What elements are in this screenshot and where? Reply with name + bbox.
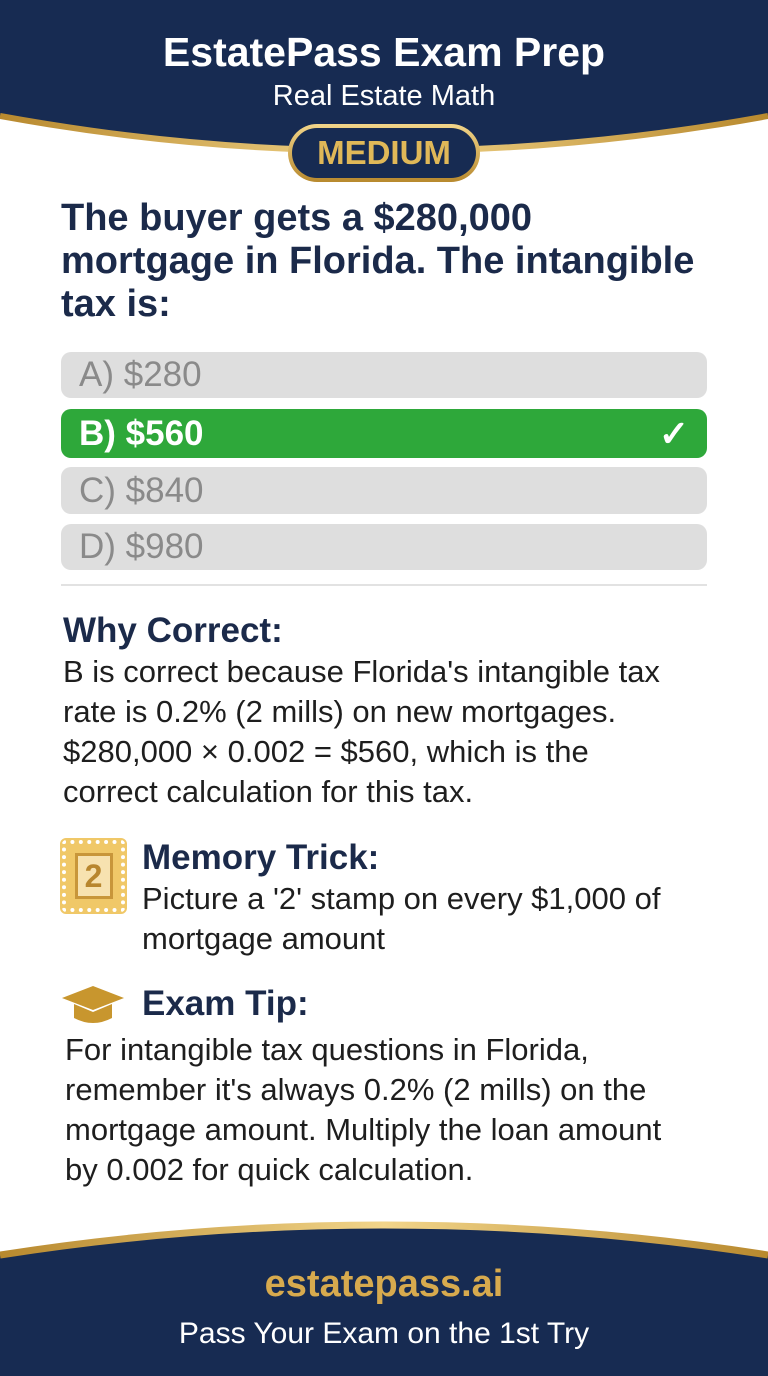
text: memory trick xyxy=(142,881,661,956)
footer tagline: Pass Your Exam on the 1st Try xyxy=(179,1317,589,1350)
text: why correct: B is correct because Florida's intangible tax xyxy=(63,654,660,689)
text: exam tip: mortgage amount. Multiply the loan amount xyxy=(65,1112,661,1147)
option B correct: B) $560 xyxy=(79,414,204,452)
text: exam tip: by 0.002 for quick calculation. xyxy=(65,1152,473,1187)
title: EstatePass Exam Prep xyxy=(163,29,605,75)
text: why correct: $280,000 × 0.002 = $560, which is the xyxy=(63,734,589,769)
header background xyxy=(0,0,768,152)
question xyxy=(61,197,694,325)
question: tax is: xyxy=(61,283,171,325)
option B correct xyxy=(61,409,707,458)
option C xyxy=(61,467,707,514)
badge: medium xyxy=(288,124,480,182)
heading: memory trick: Memory Trick: xyxy=(142,838,379,877)
text: why correct: correct calculation for this tax. xyxy=(63,774,473,809)
footer brand: estatepass.ai xyxy=(265,1263,503,1305)
text: memory trick: mortgage amount xyxy=(142,921,385,956)
question: The buyer gets a $280,000 xyxy=(61,197,532,239)
option D: D) $980 xyxy=(79,527,204,566)
option B correct: ✓ xyxy=(659,412,689,454)
heading: exam tip: Exam Tip: xyxy=(142,984,309,1023)
option D xyxy=(61,524,707,570)
option A: A) $280 xyxy=(79,355,202,394)
text: exam tip: For intangible tax questions in Florida, xyxy=(65,1032,589,1067)
text: exam tip xyxy=(65,1032,661,1187)
icon: stamp: 2 xyxy=(85,858,102,894)
text: memory trick: Picture a '2' stamp on every $1,000 of xyxy=(142,881,660,916)
badge: medium: MEDIUM xyxy=(317,134,451,171)
text: exam tip: remember it's always 0.2% (2 mills) on the xyxy=(65,1072,646,1107)
footer background xyxy=(0,1222,768,1376)
heading: why correct: Why Correct: xyxy=(63,611,283,650)
text: why correct xyxy=(63,654,660,809)
question: mortgage in Florida. The intangible xyxy=(61,240,694,282)
option A xyxy=(61,352,707,398)
text: why correct: rate is 0.2% (2 mills) on new mortgages. xyxy=(63,694,616,729)
icon: stamp xyxy=(62,840,125,912)
icon: graduation cap xyxy=(62,986,124,1023)
option C: C) $840 xyxy=(79,470,204,510)
subtitle: Real Estate Math xyxy=(273,80,495,112)
